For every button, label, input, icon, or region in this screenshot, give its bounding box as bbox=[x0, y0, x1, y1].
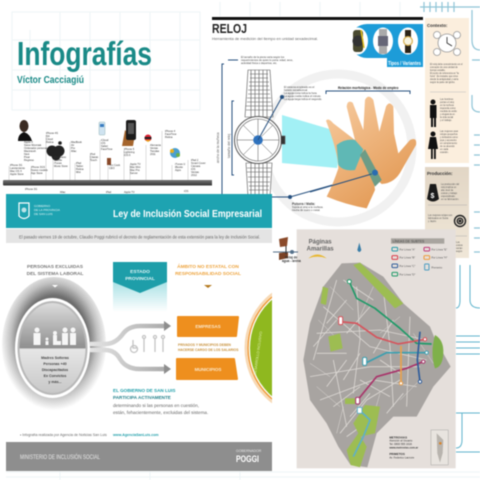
production note: y Japón. bbox=[428, 221, 437, 223]
excluded list: Personas +40 bbox=[43, 362, 67, 366]
vertical labels: ancho de la muñeca bbox=[216, 132, 220, 163]
timeline labels: Lightning bbox=[124, 150, 135, 154]
icon: compass bbox=[357, 243, 361, 252]
callout: watch types: Tipos / Variantes bbox=[388, 61, 421, 67]
production note bbox=[428, 214, 453, 223]
icon caption: Reloj de bbox=[285, 256, 298, 260]
arrows: gray flows bbox=[90, 321, 171, 374]
timeline labels: iBooks bbox=[175, 165, 183, 169]
timeline labels: Mini bbox=[76, 170, 81, 174]
map: stations bbox=[339, 280, 428, 413]
government label bbox=[34, 204, 60, 216]
icon caption: agua - arena bbox=[282, 259, 301, 263]
annotations: horario sexadecimal. bbox=[284, 88, 308, 92]
production note lower: según bbox=[456, 251, 463, 253]
map info: Atención al Usuario bbox=[389, 439, 413, 443]
line navy bbox=[417, 332, 420, 382]
timeline labels: CEO bbox=[109, 166, 115, 170]
annotations: actividad física o deportiva, etc. bbox=[241, 61, 277, 65]
icon: clocks bbox=[434, 32, 460, 56]
credit: www.AgenciaSanLuis.com bbox=[112, 433, 159, 437]
annotations: El sistema empleado es el bbox=[284, 85, 315, 89]
icon: wristwatch drawing bbox=[234, 70, 285, 197]
panel: reloj bbox=[212, 17, 425, 222]
timeline labels: iMac bbox=[71, 149, 77, 153]
box: empresas bbox=[178, 317, 238, 336]
companies note: HACERSE CARGO DE LOS SALARIOS bbox=[178, 348, 239, 352]
line premetro bbox=[353, 410, 370, 457]
woman text: en complemento bbox=[440, 142, 458, 145]
annotations: Pulsera / Malla: bbox=[292, 202, 315, 206]
icon: small device bbox=[99, 122, 105, 135]
context text: concepto de una unidad de bbox=[430, 66, 458, 69]
credit bbox=[20, 433, 159, 437]
heading: non state: RESPONSABILIDAD SOCIAL bbox=[175, 271, 241, 277]
man text: medida de estilo bbox=[440, 110, 457, 113]
timeline labels: iPhone 3G bbox=[10, 163, 22, 167]
heading: Ley de Inclusión Social Empresarial bbox=[113, 209, 262, 220]
map legend: Premetro bbox=[431, 265, 443, 269]
timeline labels: Tiendas bbox=[150, 149, 160, 153]
icon: hand with phone bbox=[122, 120, 136, 146]
icon: people bbox=[34, 328, 76, 345]
line red bbox=[341, 322, 425, 344]
timeline labels: Tim Cook bbox=[109, 163, 121, 167]
timeline labels: iOS 6 bbox=[124, 153, 131, 157]
timeline labels: iPhone 5 bbox=[124, 147, 135, 151]
timeline labels: Retina bbox=[76, 167, 84, 171]
annotations: La aguja corta indica la hora. bbox=[284, 91, 318, 95]
annotations: Sujeta el reloj a la muñeca. bbox=[292, 205, 324, 209]
icon: hand bbox=[310, 97, 416, 208]
timeline labels: iPhone 4 bbox=[165, 129, 176, 133]
woman text bbox=[439, 130, 459, 154]
timeline labels: Shuffle bbox=[54, 158, 63, 162]
vertical labels: tamaño del reloj bbox=[227, 134, 231, 158]
timeline labels: FaceTime bbox=[101, 147, 113, 151]
line orange bbox=[398, 346, 403, 383]
timeline labels: Pro bbox=[71, 146, 76, 150]
intro strip bbox=[6, 229, 272, 243]
production note lower bbox=[456, 242, 463, 253]
timeline labels: Retina bbox=[46, 140, 54, 144]
timeline labels: Apple TV bbox=[124, 190, 135, 194]
panel: right column production bbox=[425, 167, 469, 258]
excluded list: y más... bbox=[48, 380, 62, 384]
timeline labels: Smart Cover bbox=[191, 161, 206, 165]
icon: cyan projection bbox=[282, 115, 343, 168]
timeline labels: Tablet bbox=[76, 164, 83, 168]
timeline labels: Cloud bbox=[46, 137, 53, 141]
heading: contexto: Contexto: bbox=[427, 23, 448, 28]
timeline labels: Nuevo modelo bbox=[31, 168, 48, 172]
man text: y el trabajo. bbox=[440, 119, 452, 122]
timeline labels: Alemania bbox=[150, 143, 161, 147]
dimension lines bbox=[222, 60, 410, 197]
map info: Av. Federico Lacroze bbox=[389, 455, 415, 459]
companies note bbox=[178, 343, 239, 352]
man text: portan el reloj bbox=[440, 101, 454, 104]
timeline labels: Steve Wozniak bbox=[24, 143, 42, 147]
excluded list bbox=[41, 356, 69, 384]
man text: en la muñeca bbox=[440, 104, 455, 107]
timeline labels: Server bbox=[130, 171, 138, 175]
map: streets bbox=[310, 280, 433, 437]
map title: Amarillas bbox=[307, 247, 334, 253]
woman text: ocasión. bbox=[440, 152, 449, 154]
map legend: Por Línea "E" bbox=[431, 247, 447, 251]
timeline labels: Mac Mini bbox=[130, 165, 141, 169]
icon: hourglass clock bbox=[273, 237, 301, 263]
timeline labels: iTunes bbox=[54, 161, 62, 165]
heading: non state bbox=[175, 263, 241, 288]
excluded list: Discapacitados bbox=[42, 368, 68, 372]
timeline labels: Mac OS X bbox=[10, 169, 22, 173]
context text: El reloj debe conocimiento en el bbox=[430, 63, 463, 66]
map title: Páginas bbox=[309, 239, 332, 245]
production text: reloj implica un bbox=[441, 186, 457, 189]
timeline labels: Apple Store bbox=[10, 172, 24, 176]
map info: www.metrovias.com.ar bbox=[389, 445, 418, 449]
production text: costos y trabajo bbox=[441, 192, 458, 195]
excluded list: Ex Convictos bbox=[44, 374, 66, 378]
panel: map bbox=[297, 229, 456, 468]
timeline labels: MacBook bbox=[71, 140, 83, 144]
timeline labels: iPhone 3G bbox=[25, 187, 37, 191]
callout: estado provincial bbox=[113, 262, 167, 312]
map inset bbox=[431, 430, 448, 465]
timeline labels: Ventas bbox=[150, 146, 159, 150]
timeline labels: iOS bbox=[101, 141, 106, 145]
man text: Los hombres bbox=[440, 98, 454, 101]
excluded list: Madres Solteras bbox=[41, 356, 69, 360]
timeline labels: FaceTime bbox=[165, 132, 177, 136]
icon: small figure bbox=[107, 158, 111, 165]
callout: watch types bbox=[348, 24, 423, 67]
production note lower: costos bbox=[456, 244, 463, 247]
man text: la vida social bbox=[440, 117, 454, 119]
context text: según la parte del globo. bbox=[430, 81, 456, 84]
icon: money bag: $ bbox=[430, 193, 434, 200]
author: Víctor Cacciagiú bbox=[17, 75, 84, 86]
timeline labels: Ordenador personal bbox=[24, 146, 47, 150]
timeline labels: iOS bbox=[184, 189, 189, 193]
green circle: DESARROLLO INCLUSIVO bbox=[253, 331, 263, 375]
woman text: relojes pequeños bbox=[440, 133, 458, 136]
annotations bbox=[241, 55, 324, 212]
man text: y elegancia en bbox=[440, 114, 456, 116]
annotations: El tamaño de la pieza varía según los bbox=[241, 55, 285, 59]
production text: alto nivel de bbox=[441, 189, 454, 192]
box: municipios bbox=[177, 359, 237, 379]
text: government role: EL GOBIERNO DE SAN LUIS bbox=[113, 388, 175, 393]
panel: timeline bbox=[3, 120, 213, 194]
map title bbox=[307, 239, 334, 253]
icon: app cluster bbox=[170, 148, 180, 158]
companies note: PRIVADOS Y MUNICIPIOS DEBEN bbox=[178, 343, 232, 347]
callout: estado provincial: PROVINCIAL bbox=[125, 276, 155, 282]
map legend: Por Línea "B" bbox=[399, 256, 415, 260]
timeline labels: iCloud bbox=[101, 138, 109, 142]
icon caption bbox=[282, 256, 301, 263]
text: government role bbox=[113, 388, 208, 415]
watermark circle bbox=[264, 74, 412, 222]
title: Infografías bbox=[17, 36, 152, 73]
context text: El punto de referencia es "la bbox=[430, 72, 460, 75]
footer band: GOBERNADOR bbox=[236, 449, 262, 453]
map legend: LÍNEAS DE SUBTES bbox=[393, 239, 425, 243]
timeline labels: Mac Pro bbox=[130, 168, 140, 172]
timeline labels: iMac bbox=[60, 190, 66, 194]
context text: tiempo estable. bbox=[430, 69, 446, 72]
callout: estado provincial: ESTADO bbox=[130, 269, 150, 275]
timeline labels: Regreso bbox=[24, 158, 34, 162]
production text: La producción del bbox=[441, 183, 460, 186]
map info: Tel. 0800 555 1616 bbox=[389, 442, 412, 446]
intro strip: El pasado viernes 19 de octubre, Claudio Poggi rubricó el decreto de reglamentación de esta extensión para la ley de Inclusión Social. bbox=[19, 234, 260, 240]
map info bbox=[389, 435, 418, 459]
woman text: Las mujeres usan bbox=[440, 130, 459, 133]
context text: desde la antigüedad y varía bbox=[430, 78, 459, 81]
timeline labels: Classic bbox=[90, 155, 99, 159]
timeline labels: iPad 2 bbox=[191, 158, 199, 162]
context text bbox=[430, 63, 463, 84]
timeline labels: Pixar bbox=[24, 155, 30, 159]
timeline labels: iPad bbox=[106, 190, 112, 194]
timeline labels: iPad bbox=[76, 161, 82, 165]
timeline labels: Apps bbox=[175, 168, 182, 172]
woman text: en cada bbox=[440, 149, 449, 151]
icon: woman bbox=[428, 132, 438, 159]
heading: excluded people: DEL SISTEMA LABORAL bbox=[27, 271, 83, 277]
heading: non state: ÁMBITO NO ESTATAL CON bbox=[177, 263, 239, 270]
icon: map logo bbox=[308, 254, 327, 258]
timeline labels bbox=[10, 129, 206, 194]
map: city shape bbox=[303, 263, 451, 467]
footer band: POGGI bbox=[236, 454, 259, 464]
timeline labels: iOS bbox=[191, 167, 196, 171]
map legend: Por Línea "C" bbox=[399, 264, 415, 268]
production note: Los mejores relojes son bbox=[428, 214, 453, 217]
production note lower: varían bbox=[456, 247, 463, 250]
annotations: Hecha de cuero o metal. bbox=[292, 208, 321, 212]
woman text: joya y accesorio bbox=[439, 139, 457, 142]
timeline labels: iPod bbox=[90, 152, 96, 156]
timeline labels: App Store bbox=[31, 171, 43, 175]
icon: round badge bbox=[144, 134, 152, 142]
diagram: excluded circle bbox=[2, 277, 106, 413]
context text: hora". Es instante que sirve bbox=[430, 75, 459, 78]
icons: disability group bbox=[130, 336, 164, 352]
timeline labels: Macintosh bbox=[24, 149, 36, 153]
timeline labels: Retina bbox=[165, 135, 173, 139]
map: parks bbox=[321, 263, 443, 467]
map legend: Por Línea "A" bbox=[399, 247, 415, 251]
text: government role: determinando si las personas en cuestión, bbox=[113, 403, 199, 408]
timeline labels: Cámara bbox=[191, 164, 201, 168]
heading: excluded people: PERSONAS EXCLUIDAS bbox=[27, 264, 84, 270]
map legend: Por Línea "D" bbox=[399, 272, 415, 276]
icon: Steve Jobs portrait bbox=[18, 120, 32, 141]
heading: reloj: RELOJ bbox=[212, 21, 247, 36]
timeline labels: Safari bbox=[101, 144, 108, 148]
header band bbox=[6, 194, 272, 228]
vertical labels bbox=[216, 132, 231, 163]
timeline labels: iPhone 3GS bbox=[31, 165, 45, 169]
map legend bbox=[391, 238, 447, 276]
production text: en su fabricación. bbox=[441, 198, 459, 201]
timeline labels: Touch bbox=[90, 158, 97, 162]
subtitle: Herramienta de medición del tiempo en unidad sexadecimal. bbox=[212, 37, 318, 41]
production note lower: Los bbox=[456, 242, 461, 244]
timeline labels: Apple TV bbox=[130, 162, 141, 166]
map info: PRIMETOS bbox=[389, 452, 405, 456]
icon: apple logo bbox=[46, 141, 64, 160]
government label: DE SAN LUIS bbox=[34, 212, 53, 216]
green circle bbox=[244, 292, 273, 404]
production note: fabricados en Suiza bbox=[428, 217, 449, 220]
icon: man bbox=[430, 100, 436, 127]
timeline labels: Siri bbox=[46, 134, 50, 138]
line teal bbox=[365, 353, 427, 363]
production text bbox=[441, 183, 460, 201]
box: municipios: MUNICIPIOS bbox=[195, 367, 221, 372]
heading: excluded people bbox=[27, 264, 84, 277]
timeline bar bbox=[3, 180, 213, 186]
timeline labels: Music Store bbox=[54, 164, 68, 168]
timeline labels: iTunes U bbox=[175, 162, 185, 166]
production text: especializado bbox=[441, 196, 456, 198]
map legend: Por Línea "H" bbox=[431, 256, 447, 260]
man text bbox=[440, 98, 457, 122]
morphology heading: Relación morfológica - Modo de empleo bbox=[338, 86, 398, 90]
annotations: La aguja media indica el minuto. bbox=[284, 94, 321, 98]
annotations: requerimientos de quien lo porta: edad, sexo, bbox=[241, 58, 293, 62]
timeline labels: Ventas bbox=[191, 170, 200, 174]
credit: • Infografía realizada por Agencia de Noticias San Luis bbox=[20, 433, 107, 437]
icon: target bbox=[454, 216, 466, 226]
timeline labels: Lanzamiento bbox=[10, 166, 25, 170]
man text: izquierda como bbox=[440, 107, 456, 110]
line green bbox=[349, 282, 432, 344]
footer band bbox=[6, 442, 272, 471]
annotations: La aguja larga indica el segundo. bbox=[284, 97, 322, 101]
timeline labels: 2011 bbox=[150, 152, 156, 156]
woman text: de su atuendo bbox=[440, 145, 455, 148]
map: metro lines bbox=[341, 282, 432, 457]
government label: GOBIERNO bbox=[34, 204, 51, 208]
timeline labels: iPhone 4S bbox=[46, 131, 58, 135]
heading: produccion: Producción: bbox=[427, 171, 453, 176]
woman text: y delicados como bbox=[440, 137, 458, 139]
timeline labels: 2012 bbox=[191, 173, 197, 177]
timeline labels: iPod Nano bbox=[54, 155, 67, 159]
panel: ley de inclusion bbox=[2, 193, 273, 472]
text: government role: PARTICIPA ACTIVAMENTE bbox=[113, 395, 171, 400]
timeline labels: Air bbox=[71, 143, 74, 147]
box: empresas: EMPRESAS bbox=[195, 324, 221, 329]
text: government role: están, fehacientemente, excluidas del sistema. bbox=[113, 410, 208, 415]
line purple bbox=[358, 362, 423, 400]
timeline labels: Apple II bbox=[24, 140, 33, 144]
map info: METROVIAS bbox=[389, 435, 407, 439]
timeline labels: Next bbox=[24, 152, 30, 156]
icon: province emblem bbox=[19, 203, 29, 218]
footer band: MINISTERIO DE INCLUSIÓN SOCIAL bbox=[20, 454, 101, 461]
government label: DE LA PROVINCIA bbox=[34, 208, 60, 212]
panel: right column context bbox=[425, 18, 469, 163]
